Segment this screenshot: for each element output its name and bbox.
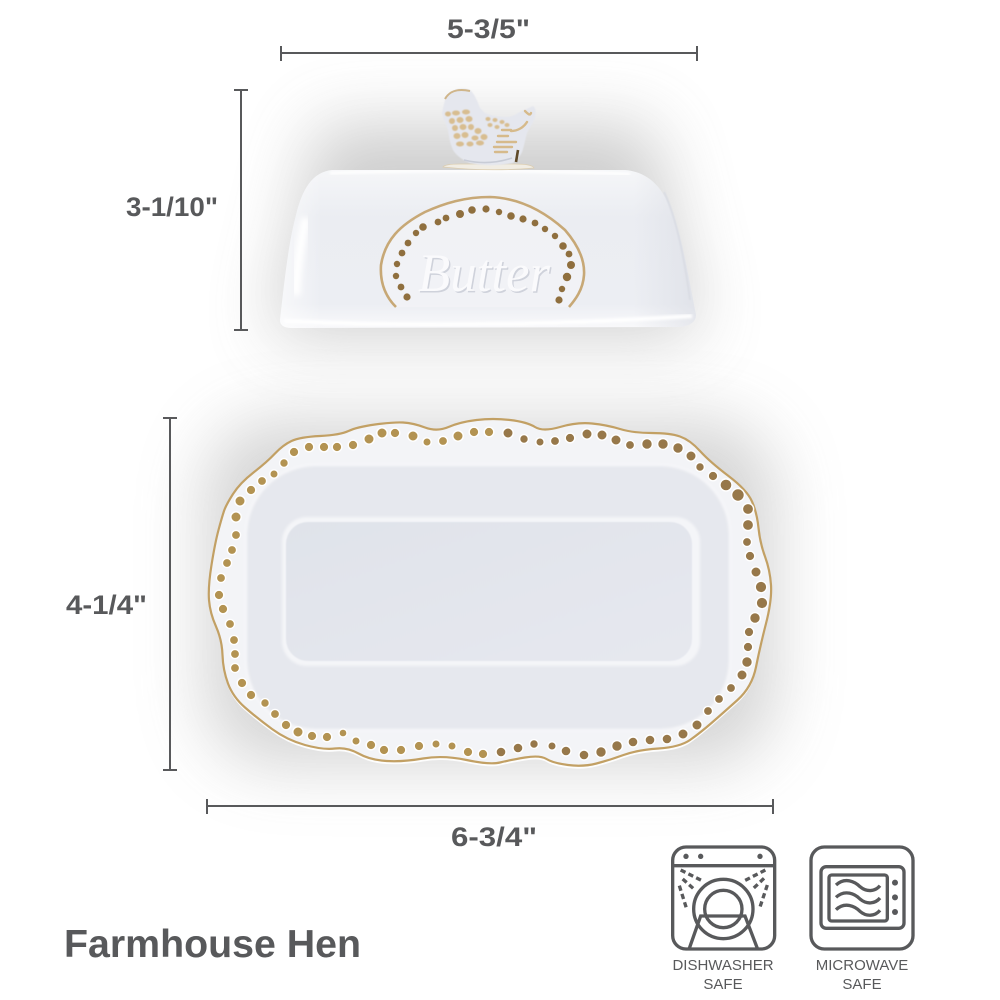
title: Farmhouse Hen bbox=[64, 923, 361, 966]
plate bbox=[209, 419, 771, 769]
dimension: lid height bbox=[126, 90, 248, 330]
soft grey background shadows bbox=[205, 125, 775, 765]
dimension: plate height: 4-1/4" bbox=[66, 590, 147, 620]
dimension: plate height bbox=[66, 418, 177, 770]
hen knob bbox=[442, 89, 536, 170]
dimension: lid width: 5-3/5" bbox=[447, 14, 530, 44]
plate rim slope bbox=[246, 465, 730, 730]
plate beaded dots: right half bbox=[496, 428, 768, 760]
dimension: lid height: 3-1/10" bbox=[126, 192, 218, 222]
lid emblem arc bbox=[381, 197, 584, 307]
icon: dishwasher safe bbox=[673, 847, 775, 949]
embossed word Butter: Butter bbox=[419, 244, 552, 304]
plate centre well bbox=[282, 517, 700, 666]
lid emblem dots bbox=[393, 205, 575, 304]
label: microwave safe: MICROWAVE bbox=[816, 957, 908, 974]
lid: butter dish cover bbox=[280, 170, 696, 328]
plate beaded dots: left half bbox=[214, 427, 494, 759]
dimension: lid width bbox=[281, 14, 697, 61]
dimension: plate width: 6-3/4" bbox=[451, 822, 537, 852]
label: microwave safe: SAFE bbox=[842, 976, 882, 993]
label: dishwasher safe: SAFE bbox=[703, 976, 743, 993]
label: dishwasher safe: DISHWASHER bbox=[672, 957, 774, 974]
dimension: plate width bbox=[207, 799, 773, 852]
icon: microwave safe bbox=[811, 847, 913, 949]
embossed word Butter: Butter bbox=[418, 243, 551, 303]
